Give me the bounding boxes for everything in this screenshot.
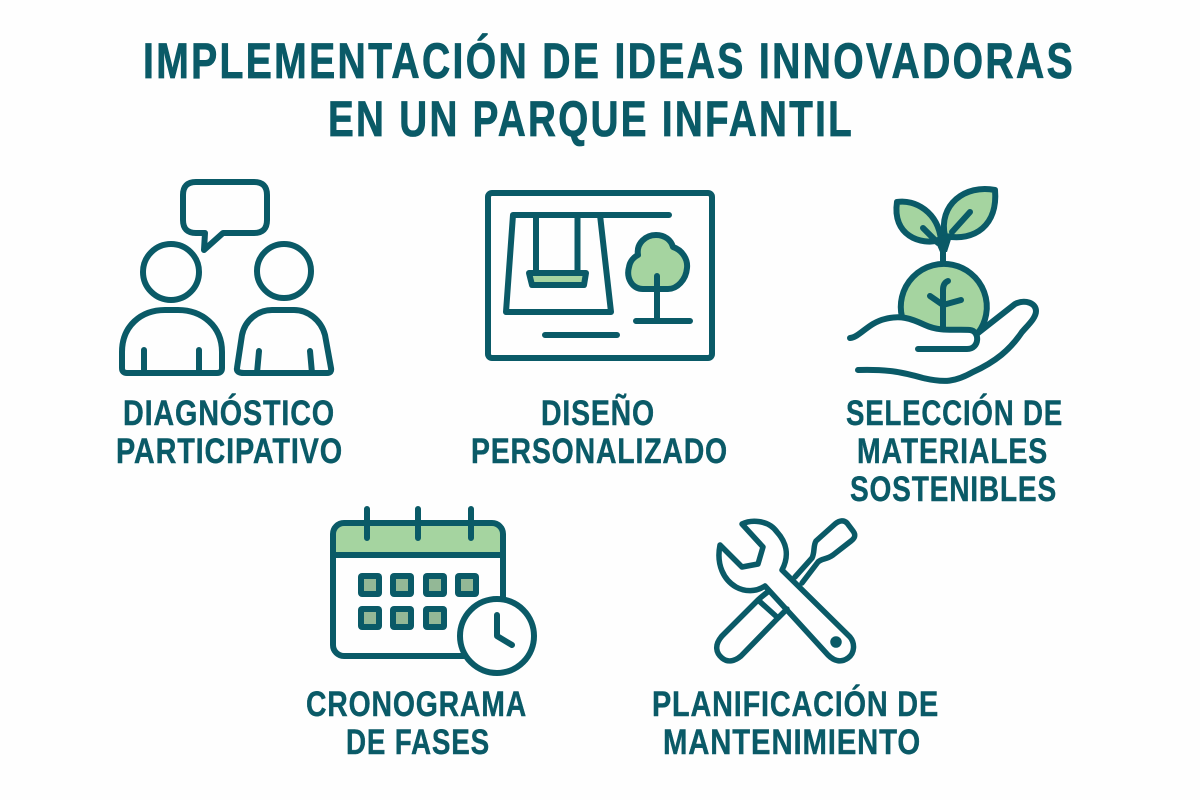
label: cronograma de fases [306,685,527,762]
label: selección de materiales sostenibles: SOSTENIBLES [850,470,1057,509]
title: EN UN PARQUE INFANTIL [328,91,854,147]
panel: diseño personalizado [471,193,728,471]
label: selección de materiales sostenibles: SELECCIÓN DE [846,393,1063,433]
label: diagnóstico participativo: DIAGNÓSTICO [123,393,335,433]
label: selección de materiales sostenibles: MATERIALES [857,432,1048,471]
label: diseño personalizado [471,394,728,471]
label: diagnóstico participativo [116,393,343,471]
panel: planificación de mantenimiento [652,521,939,762]
panel: diagnóstico participativo [116,182,343,471]
icon: calendar with clock [333,509,534,673]
panel: selección de materiales sostenibles [846,189,1063,509]
label: cronograma de fases: DE FASES [346,723,490,762]
label: diseño personalizado: DISEÑO [541,394,655,433]
title [143,33,1075,147]
label: cronograma de fases: CRONOGRAMA [306,685,527,724]
label: diseño personalizado: PERSONALIZADO [471,432,728,471]
label: planificación de mantenimiento: MANTENIMIENTO [663,723,921,762]
icon: two people talking with speech bubble [122,182,331,373]
icon: hand holding a seedling [850,189,1036,381]
icon: crossed wrench and screwdriver [717,521,855,661]
panel: cronograma de fases [306,509,534,762]
label: diagnóstico participativo: PARTICIPATIVO [116,432,343,471]
label: selección de materiales sostenibles [846,393,1063,509]
label: planificación de mantenimiento: PLANIFICACIÓN DE [652,684,939,724]
label: planificación de mantenimiento [652,684,939,762]
icon: playground blueprint with swing and tree [488,193,712,358]
